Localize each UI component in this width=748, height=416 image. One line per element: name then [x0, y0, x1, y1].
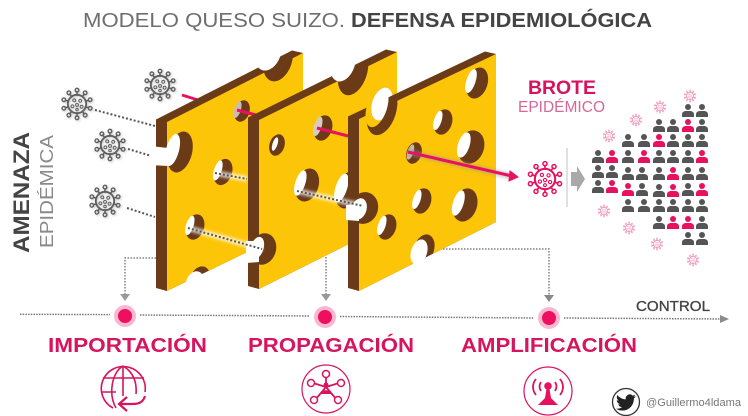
arrow: outbreak ray [408, 152, 518, 181]
rays through slice 2 [188, 128, 348, 249]
control point: amplificación [538, 307, 560, 329]
ray through slice 3 [297, 191, 363, 206]
small spreading viruses [598, 90, 699, 266]
heading: brote epidémico: EPIDÉMICO [518, 99, 605, 116]
heading: brote epidémico: BROTE [528, 77, 596, 99]
cheese slice 3 [346, 52, 496, 291]
threat viruses [62, 69, 175, 217]
author handle: @Guillermo4ldama [646, 397, 742, 409]
people crowd [592, 104, 708, 245]
title: MODELO QUESO SUIZO. [83, 10, 345, 32]
icon: outbreak virus [528, 162, 562, 196]
connector lines to control points [125, 249, 549, 295]
control point: propagación [314, 306, 336, 328]
label: amplificación: AMPLIFICACIÓN [461, 333, 637, 357]
control timeline [20, 294, 729, 323]
label: control: CONTROL [636, 298, 710, 315]
label: importación: IMPORTACIÓN [48, 333, 207, 357]
icon: propagation network [302, 365, 350, 413]
divider and arrow [567, 148, 585, 207]
icon: amplification antenna [524, 367, 572, 415]
heading: brote epidémico [518, 77, 605, 116]
label: propagación: PROPAGACIÓN [248, 333, 414, 357]
heading: amenaza epidémica: EPIDÉMICA [36, 134, 57, 248]
cheese slice 1 [150, 50, 303, 291]
heading: amenaza epidémica: AMENAZA [9, 132, 34, 253]
title [83, 8, 652, 32]
icon: twitter bird [612, 388, 640, 416]
cheese slice 2 [246, 41, 397, 289]
rays through slice 1 [215, 110, 256, 179]
icon: globe with incoming arrow [101, 366, 145, 411]
control point: importación [114, 305, 136, 327]
threat lines [95, 95, 198, 217]
title: DEFENSA EPIDEMIOLÓGICA [351, 8, 652, 32]
heading: amenaza epidémica [9, 132, 57, 253]
